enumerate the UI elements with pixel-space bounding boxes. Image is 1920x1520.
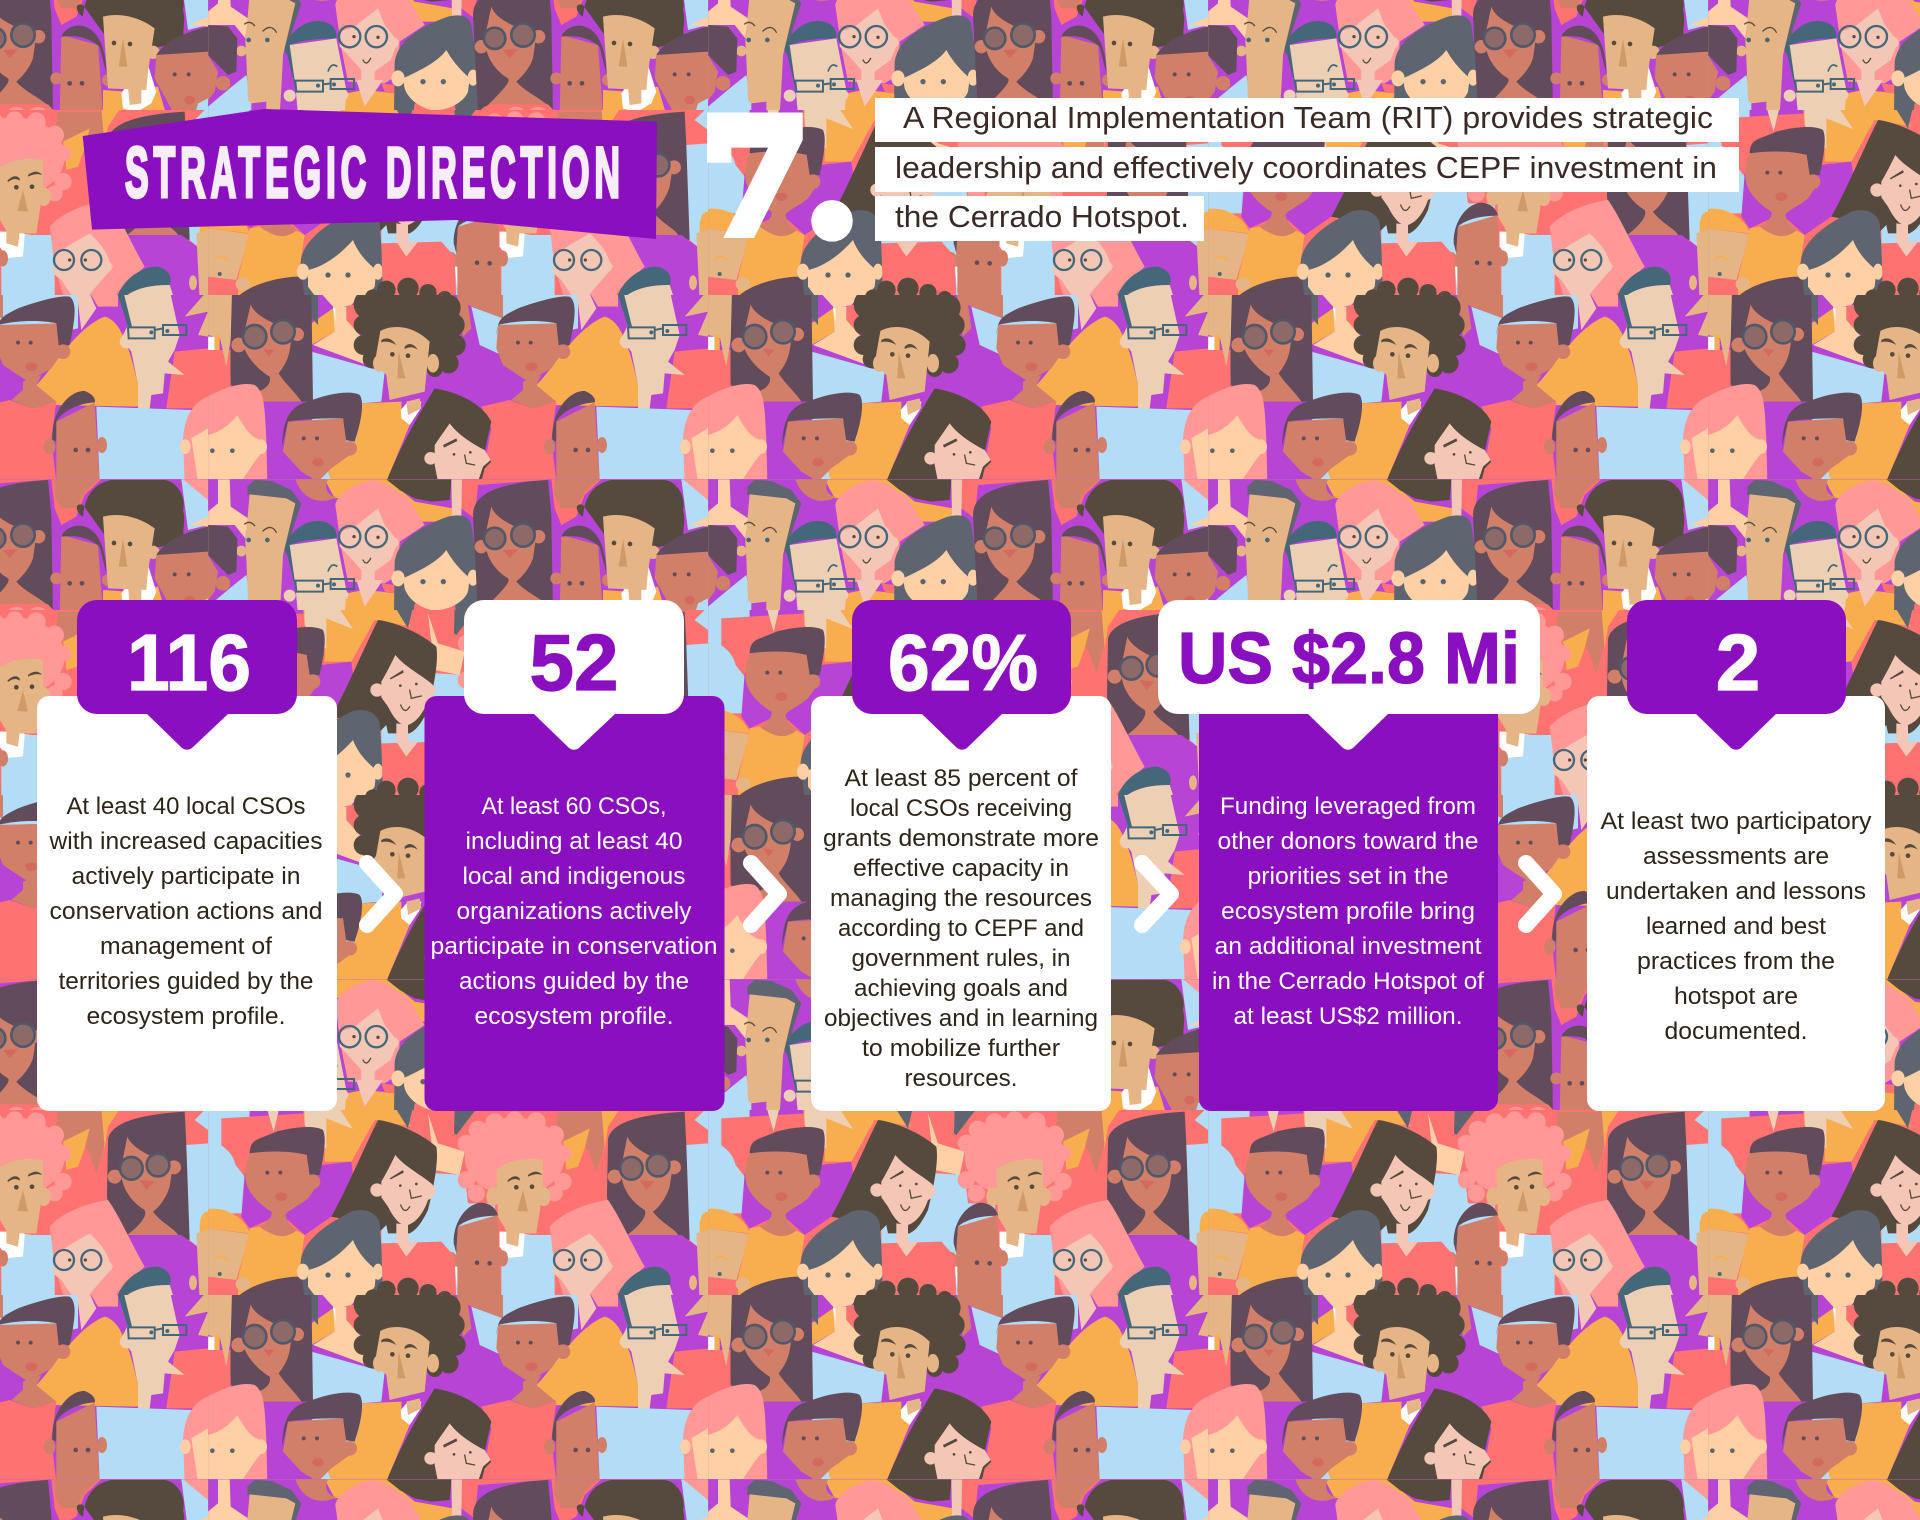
panel: 116 CSOs: ecosystem profile. bbox=[86, 1003, 286, 1030]
panel: 2 assessments: assessments are bbox=[1643, 843, 1829, 870]
banner: strategic direction bbox=[83, 109, 657, 239]
panel: 2 assessments: hotspot are bbox=[1674, 983, 1798, 1010]
arrow 3 bbox=[1142, 863, 1171, 925]
tag: US $2.8 Mi bbox=[1158, 600, 1540, 750]
tag: 116: 116 bbox=[127, 618, 251, 707]
strategic direction statement: A Regional Implementation Team (RIT) provides strategic bbox=[903, 100, 1713, 135]
panel: 62 percent: resources. bbox=[904, 1065, 1018, 1092]
panel: 52 CSOs: including at least 40 bbox=[466, 828, 682, 855]
panel: 2 assessments: documented. bbox=[1664, 1018, 1808, 1045]
tag: 52 bbox=[464, 600, 684, 750]
panel: 62 percent: achieving goals and bbox=[854, 975, 1068, 1002]
tag: 52: 52 bbox=[530, 618, 618, 707]
panel: 2 assessments: At least two participatory bbox=[1600, 808, 1872, 835]
banner: strategic direction: STRATEGIC DIRECTION bbox=[125, 132, 620, 212]
strategic direction statement: the Cerrado Hotspot. bbox=[895, 199, 1189, 234]
panel: US$2.8 million: an additional investment bbox=[1214, 933, 1482, 960]
panel: US$2.8 million: in the Cerrado Hotspot of bbox=[1212, 968, 1484, 995]
big number seven: . bbox=[800, 11, 864, 294]
panel: 52 CSOs: participate in conservation bbox=[430, 933, 718, 960]
arrow 4 bbox=[1526, 863, 1554, 925]
panel: 52 CSOs: At least 60 CSOs, bbox=[482, 793, 666, 820]
panel: 62 percent: managing the resources bbox=[830, 885, 1092, 912]
panel: 52 CSOs bbox=[424, 600, 724, 1111]
strategic direction statement bbox=[875, 98, 1739, 241]
arrow 1 bbox=[367, 863, 395, 925]
panel: 52 CSOs: ecosystem profile. bbox=[474, 1003, 674, 1030]
panel: 52 CSOs: actions guided by the bbox=[459, 968, 689, 995]
panel: 2 assessments bbox=[1587, 600, 1885, 1111]
panel: US$2.8 million: ecosystem profile bring bbox=[1221, 898, 1475, 925]
panel: 62 percent: local CSOs receiving bbox=[850, 795, 1072, 822]
tag: 116 bbox=[77, 600, 297, 750]
panel: 52 CSOs: organizations actively bbox=[456, 898, 692, 925]
panel: US$2.8 million: other donors toward the bbox=[1218, 828, 1478, 855]
panel: 2 assessments: practices from the bbox=[1637, 948, 1835, 975]
panel: 62 percent: according to CEPF and bbox=[838, 915, 1084, 942]
panel: US$2.8 million bbox=[1158, 600, 1540, 1111]
panel: 116 CSOs: management of bbox=[100, 933, 272, 960]
panel: 116 CSOs: actively participate in bbox=[72, 863, 300, 890]
tag: 62%: 62% bbox=[888, 618, 1038, 707]
tag: US $2.8 Mi: US $2.8 Mi bbox=[1178, 619, 1520, 699]
big number seven bbox=[702, 11, 864, 294]
panel: 2 assessments: undertaken and lessons bbox=[1606, 878, 1866, 905]
panel: 2 assessments: learned and best bbox=[1646, 913, 1826, 940]
panel: 116 CSOs: conservation actions and bbox=[50, 898, 322, 925]
panel: 62 percent: objectives and in learning bbox=[824, 1005, 1098, 1032]
panel: 62 percent bbox=[811, 600, 1111, 1111]
strategic direction statement: leadership and effectively coordinates CEPF investment in bbox=[895, 150, 1717, 185]
panel: 62 percent: to mobilize further bbox=[862, 1035, 1060, 1062]
panel: 116 CSOs bbox=[37, 600, 337, 1111]
panel: US$2.8 million: at least US$2 million. bbox=[1234, 1003, 1462, 1030]
panel: US$2.8 million: Funding leveraged from bbox=[1220, 793, 1476, 820]
big number seven: 7 bbox=[702, 88, 808, 268]
panel: 116 CSOs: territories guided by the bbox=[58, 968, 314, 995]
panel: 116 CSOs: with increased capacities bbox=[48, 828, 323, 855]
arrow 2 bbox=[751, 863, 779, 925]
panel: 62 percent: grants demonstrate more bbox=[823, 825, 1099, 852]
tag: 62% bbox=[852, 600, 1071, 750]
panel: US$2.8 million: priorities set in the bbox=[1248, 863, 1448, 890]
panel: 62 percent: effective capacity in bbox=[853, 855, 1069, 882]
panel: 62 percent: government rules, in bbox=[852, 945, 1070, 972]
tag: 2 bbox=[1627, 600, 1846, 750]
panel: 116 CSOs: At least 40 local CSOs bbox=[66, 793, 306, 820]
tag: 2: 2 bbox=[1716, 618, 1760, 707]
panel: 52 CSOs: local and indigenous bbox=[462, 863, 686, 890]
panel: 62 percent: At least 85 percent of bbox=[844, 765, 1078, 792]
